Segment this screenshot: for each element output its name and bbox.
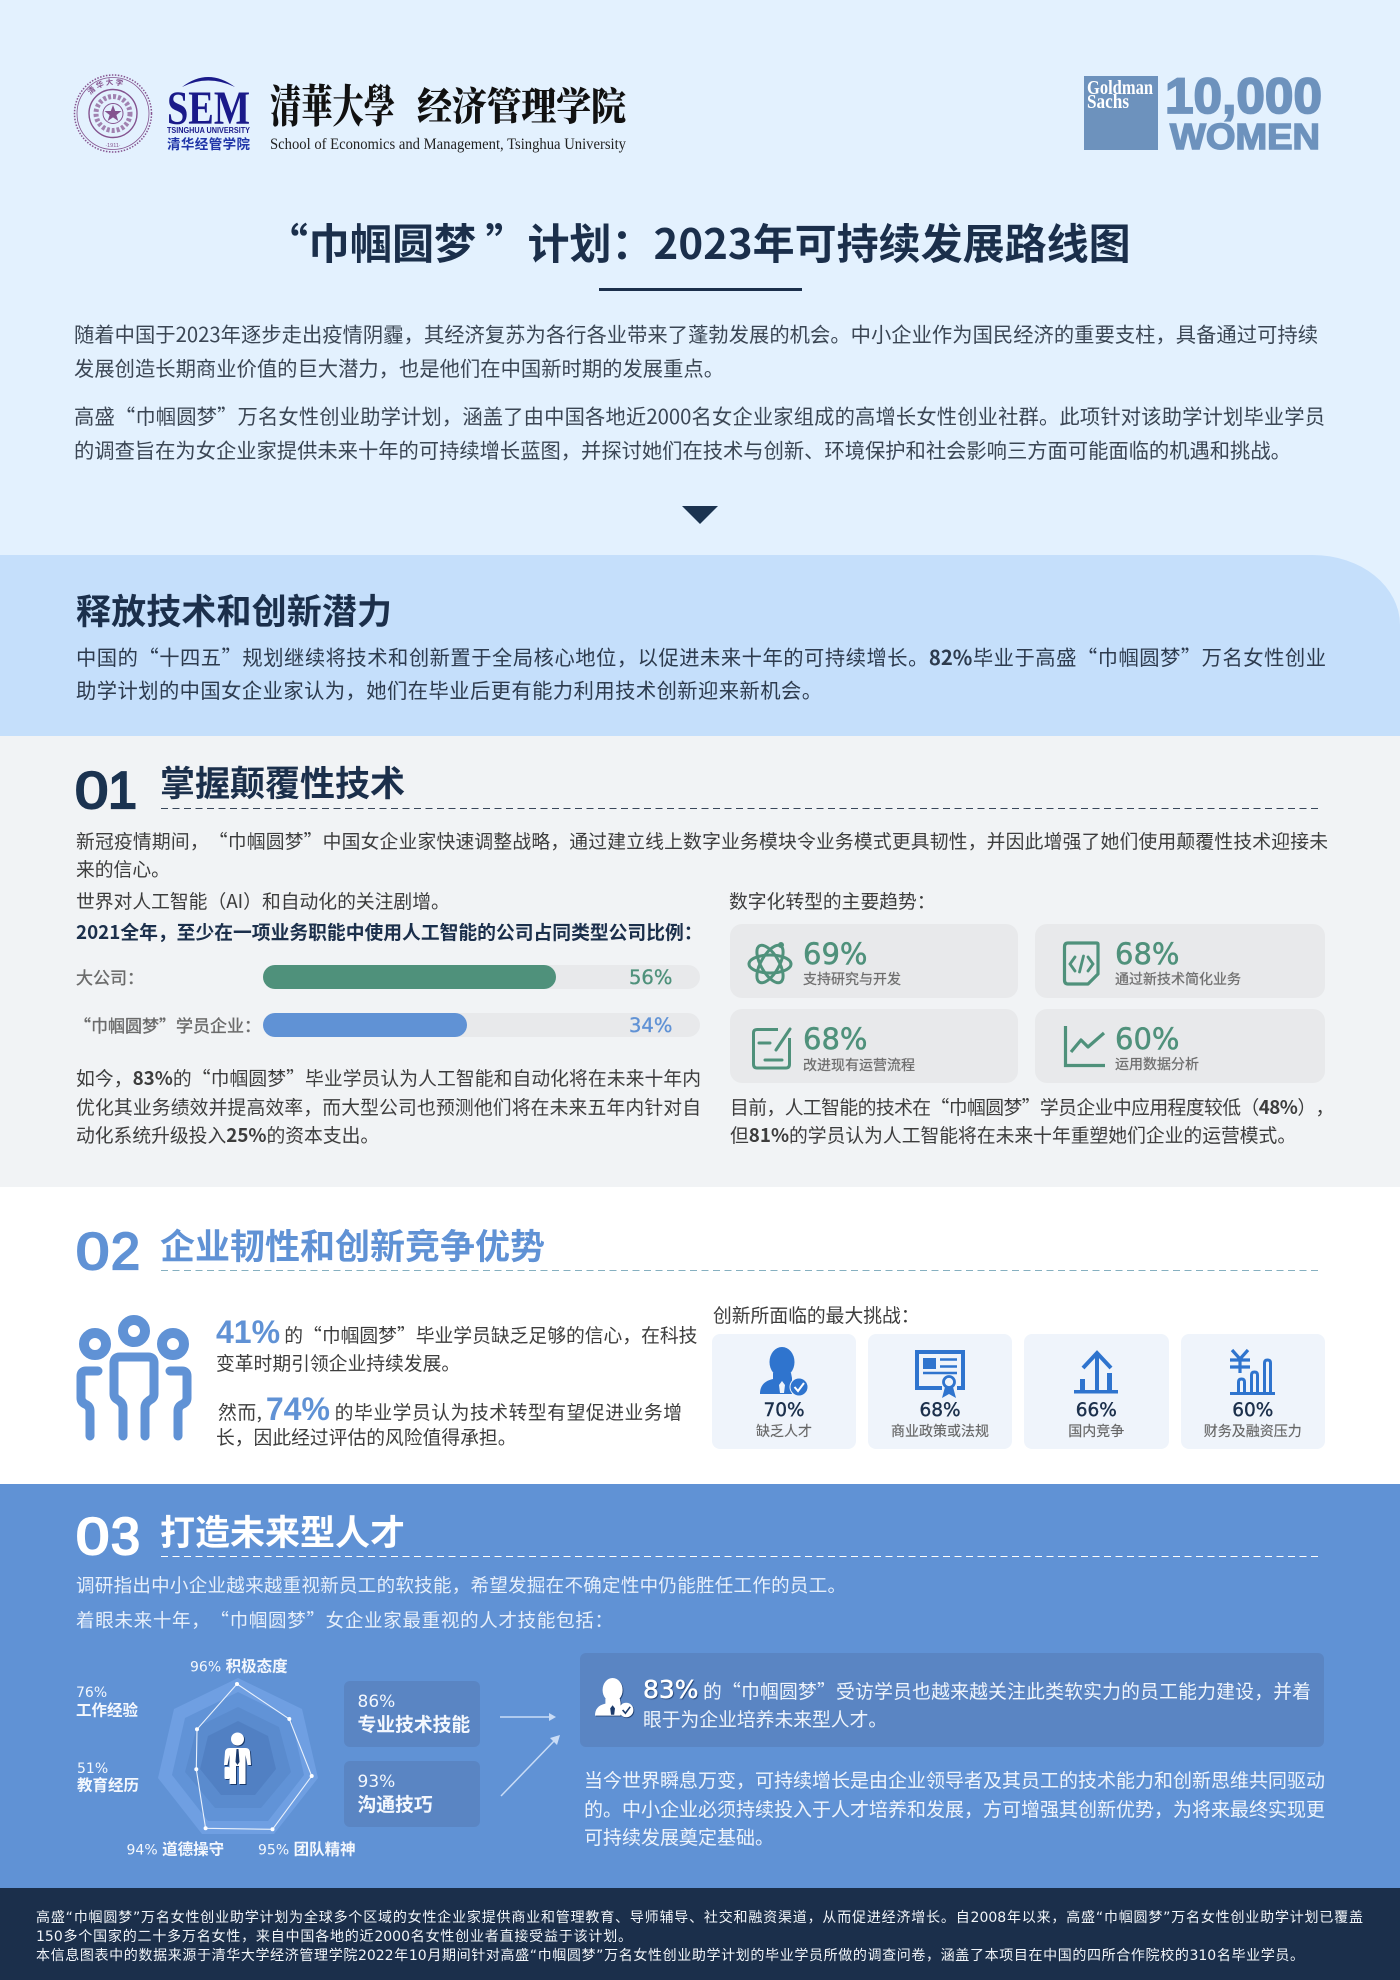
text block: 41% confidence [216, 1314, 697, 1376]
card: simplify business: 68% [1115, 937, 1179, 971]
text block: AI outlook [76, 1064, 701, 1148]
panel: 02 resilience and innovation [0, 1187, 1400, 1484]
chart labels: 96% 积极态度 [190, 1654, 288, 1676]
card: financial pressure: 财务及融资压力 [1204, 1421, 1302, 1441]
icon: line chart [1064, 1026, 1105, 1068]
logo: SEM wordmark: 清华经管学院 [167, 133, 250, 153]
chart labels: 教育经历 [77, 1774, 139, 1796]
text block: closing paragraph: 当今世界瞬息万变，可持续增长是由企业领导者及其员工的技术能力和创新思维共同驱动 [584, 1766, 1325, 1793]
callout: technical skills [344, 1681, 480, 1747]
chart labels: 95% 团队精神 [258, 1838, 356, 1860]
callout: communication skills: 93% [358, 1772, 395, 1792]
text block: 眼于为企业培养未来型人才。 [643, 1705, 887, 1732]
logo: Tsinghua SEM [74, 70, 626, 153]
callout: communication skills: 沟通技巧 [358, 1790, 433, 1817]
arrow: diagonal [500, 1735, 560, 1796]
panel: header introduction [0, 0, 1400, 660]
panel: unlocking technology and innovation [0, 555, 1400, 736]
card: simplify business [1035, 924, 1325, 998]
logo: Goldman Sachs 10,000 Women: Goldman [1087, 77, 1153, 99]
section number 01: 0 [75, 762, 108, 820]
section number 01: 1 [108, 762, 137, 820]
section number 02 [76, 1223, 140, 1281]
chart title: 2021全年，至少在一项业务职能中使用人工智能的公司占同类型公司比例： [76, 918, 703, 945]
text block: closing paragraph: 的。中小企业必须持续投入于人才培养和发展，方可增强其创新优势，为将来最终实现更 [584, 1794, 1325, 1822]
logo: school name: 经济管理学院 [417, 76, 626, 132]
text block: AI application: 目前，人工智能的技术在“巾帼圆梦”学员企业中应用程度较低（48%）， [730, 1093, 1334, 1120]
text block: section intro [76, 1572, 846, 1633]
data polygon [194, 1682, 314, 1831]
icon: person badge [760, 1347, 808, 1396]
section number 02: 0 [76, 1223, 109, 1281]
text block: digital trends heading: 数字化转型的主要趋势： [729, 887, 936, 914]
icon: edit form [752, 1027, 792, 1070]
chart labels: 76% [76, 1685, 107, 1701]
section number 03 [76, 1508, 140, 1566]
card: policy or regulation: 68% [919, 1400, 961, 1421]
chart labels [76, 1654, 356, 1860]
callout: technical skills: 专业技术技能 [358, 1710, 470, 1737]
logo: school name: 清華大學 [270, 70, 395, 135]
section number 01 [75, 762, 137, 820]
text block: programme description and data source: 150多个国家的二十多万名女性，来自中国各地的近2000名女性创业者直接受益于该计划。 [36, 1929, 632, 1945]
panel: 01 disruptive technology [0, 736, 1400, 1187]
chart labels: 51% [77, 1761, 108, 1777]
card: improve processes [730, 1009, 1018, 1083]
text block: section intro: 调研指出中小企业越来越重视新员工的软技能，希望发掘在不确定性中仍能胜任工作的员工。 [76, 1572, 846, 1598]
text block: introduction paragraph 1: 随着中国于2023年逐步走出疫情阴霾，其经济复苏为各行各业带来了蓬勃发展的机会。中小企业作为国民经济的重要支柱，具备通过可持续 [74, 318, 1318, 348]
callout: communication skills [344, 1761, 480, 1827]
text block: 41% confidence: 变革时期引领企业持续发展。 [216, 1349, 460, 1376]
card: data analytics: 运用数据分析 [1115, 1054, 1199, 1074]
logo: SEM wordmark: SEM [167, 82, 250, 135]
text block: 83% 的“巾帼圆梦”受访学员也越来越关注此类软实力的员工能力建设，并着 [643, 1675, 1311, 1704]
card: improve processes: 改进现有运营流程 [803, 1055, 915, 1075]
icon: businessperson [224, 1732, 251, 1784]
radar chart: talent skills [76, 1654, 356, 1860]
logo: SEM wordmark [167, 77, 251, 153]
card: R&D [730, 924, 1018, 998]
logo: Goldman Sachs 10,000 Women: Sachs [1087, 91, 1129, 113]
card: R&D: 支持研究与开发 [803, 969, 901, 989]
text block: 中国的“十四五”规划继续将技术和创新置于全局核心地位，以促进未来十年的可持续增长。82%毕业于高盛“巾帼圆梦”万名女性创业 [76, 641, 1326, 671]
logo: school name [270, 70, 626, 153]
card: policy or regulation [868, 1334, 1012, 1449]
text block: AI attention: 世界对人工智能（AI）和自动化的关注剧增。 [76, 887, 450, 914]
text block: section intro: 来的信心。 [76, 855, 170, 882]
card: data analytics [1035, 1009, 1325, 1083]
bar: large companies [76, 964, 700, 989]
text block: AI application [730, 1093, 1334, 1148]
card: domestic competition [1024, 1334, 1168, 1449]
card: improve processes: 68% [803, 1022, 867, 1056]
card: data analytics: 60% [1115, 1022, 1179, 1056]
card: domestic competition: 66% [1076, 1400, 1117, 1421]
callout: 83% soft skills [580, 1653, 1324, 1747]
card: simplify business: 通过新技术简化业务 [1115, 969, 1241, 989]
section number 03: 3 [111, 1508, 140, 1566]
logo: SEM wordmark: TSINGHUA UNIVERSITY [167, 126, 251, 135]
panel: 03 future-ready talent [0, 1484, 1400, 1888]
icon: Tsinghua seal: ·1911· [105, 143, 121, 149]
text block: section intro [76, 827, 1328, 882]
text block: AI outlook: 优化其业务绩效并提高效率，而大型公司也预测他们将在未来五年内针对自 [76, 1092, 701, 1120]
text block [643, 1675, 1311, 1732]
text block: programme description and data source: 高盛“巾帼圆梦”万名女性创业助学计划为全球多个区域的女性企业家提供商业和管理教育、导师辅导、社交和融资渠道，从而促进经济增长。自2008年以来，高盛“巾帼圆梦”万名女性创业助学计划已覆盖 [36, 1910, 1363, 1926]
card: lack of talent: 70% [763, 1400, 805, 1421]
chart labels: 工作经验 [76, 1698, 139, 1720]
bar: large companies: 大公司： [76, 964, 144, 989]
logo: Goldman Sachs 10,000 Women: WOMEN [1170, 116, 1320, 157]
text block: introduction paragraph 1: 发展创造长期商业价值的巨大潜力，也是他们在中国新时期的发展重点。 [74, 352, 724, 382]
text block: AI outlook: 动化系统升级投入25%的资本支出。 [76, 1121, 379, 1148]
bar: large companies: 56% [629, 966, 672, 989]
card: financial pressure: 60% [1232, 1400, 1273, 1421]
icon: person badge [595, 1678, 634, 1718]
heading: 打造未来型人才 [160, 1505, 405, 1556]
card: domestic competition: 国内竞争 [1068, 1421, 1124, 1441]
text block: introduction paragraph 2: 的调查旨在为女企业家提供未来十年的可持续增长蓝图，并探讨她们在技术与创新、环境保护和社会影响三方面可能面临的机遇和挑战。 [74, 434, 1291, 464]
heading: 企业韧性和创新竞争优势 [160, 1219, 545, 1270]
bar: programme alumni companies: “巾帼圆梦”学员企业： [74, 1012, 261, 1037]
text block: programme description and data source: 本信息图表中的数据来源于清华大学经济管理学院2022年10月期间针对高盛“巾帼圆梦”万名女性创业助学计划的毕业学员所做的调查问卷，涵盖了本项目在中国的四所合作院校的310名毕业学员。 [36, 1948, 1304, 1964]
bar: programme alumni companies [74, 1012, 700, 1037]
text block: introduction paragraph 2: 高盛“巾帼圆梦”万名女性创业助学计划，涵盖了由中国各地近2000名女企业家组成的高增长女性创业社群。此项针对该助学计划毕业学员 [74, 400, 1325, 430]
text block: 74% transformation: 长，因此经过评估的风险值得承担。 [216, 1423, 516, 1450]
icon: certificate [915, 1350, 965, 1398]
arrow: horizontal [500, 1713, 556, 1721]
logo: Goldman Sachs 10,000 Women [1084, 68, 1322, 157]
card: lack of talent [712, 1334, 856, 1449]
card: financial pressure [1180, 1334, 1325, 1449]
text block: challenges heading: 创新所面临的最大挑战： [713, 1301, 920, 1328]
title: “巾帼圆梦 ”计划：2023年可持续发展路线图 [266, 211, 1131, 272]
card: R&D: 69% [803, 937, 867, 971]
icon: code document [1062, 941, 1100, 986]
panel: footer notes [0, 1888, 1400, 1980]
bar chart: AI adoption [74, 918, 703, 1037]
icon: Tsinghua seal: 清 华 大 学 [87, 78, 123, 95]
icon: people group [76, 1315, 192, 1440]
heading: 释放技术和创新潜力 [76, 584, 392, 635]
card: policy or regulation: 商业政策或法规 [891, 1421, 989, 1441]
chart labels: 94% 道德操守 [126, 1838, 224, 1860]
heading: 掌握颠覆性技术 [160, 756, 405, 807]
section number 02: 2 [111, 1223, 140, 1281]
text block [76, 641, 1326, 704]
icon: yen and bars [1230, 1348, 1275, 1395]
logo: Goldman Sachs 10,000 Women: 10,000 [1165, 68, 1322, 124]
text block: 74% transformation [216, 1391, 682, 1450]
text block: programme description and data source [36, 1910, 1363, 1964]
text block: 74% transformation: 然而,74% 的毕业学员认为技术转型有望促进业务增 [218, 1391, 682, 1427]
text block: introduction paragraph 2 [74, 400, 1325, 464]
icon: atom [748, 942, 792, 984]
logo: school name: School of Economics and Management, Tsinghua University [270, 136, 626, 153]
text block: introduction paragraph 1 [74, 318, 1318, 382]
callout: technical skills: 86% [358, 1692, 395, 1712]
icon: arrow and bars [1074, 1350, 1118, 1394]
text block: 助学计划的中国女企业家认为，她们在毕业后更有能力利用技术创新迎来新机会。 [76, 674, 822, 704]
card: lack of talent: 缺乏人才 [756, 1421, 812, 1441]
icon: Tsinghua seal [74, 74, 152, 153]
text block: section intro: 新冠疫情期间，“巾帼圆梦”中国女企业家快速调整战略，通过建立线上数字业务模块令业务模式更具韧性，并因此增强了她们使用颠覆性技术迎接未 [76, 827, 1328, 854]
arrow: down triangle [682, 506, 718, 524]
text block: section intro: 着眼未来十年，“巾帼圆梦”女企业家最重视的人才技能包括： [76, 1607, 613, 1633]
section number 03: 0 [76, 1508, 109, 1566]
bar: programme alumni companies: 34% [629, 1014, 672, 1037]
text block: closing paragraph: 可持续发展奠定基础。 [584, 1823, 774, 1850]
text block: AI outlook: 如今，83%的“巾帼圆梦”毕业学员认为人工智能和自动化将在未来十年内 [76, 1064, 701, 1091]
text block: AI application: 但81%的学员认为人工智能将在未来十年重塑她们企业的运营模式。 [730, 1121, 1296, 1148]
text block: 41% confidence: 41% 的“巾帼圆梦”毕业学员缺乏足够的信心，在科技 [216, 1314, 697, 1350]
text block: closing paragraph [584, 1766, 1325, 1850]
